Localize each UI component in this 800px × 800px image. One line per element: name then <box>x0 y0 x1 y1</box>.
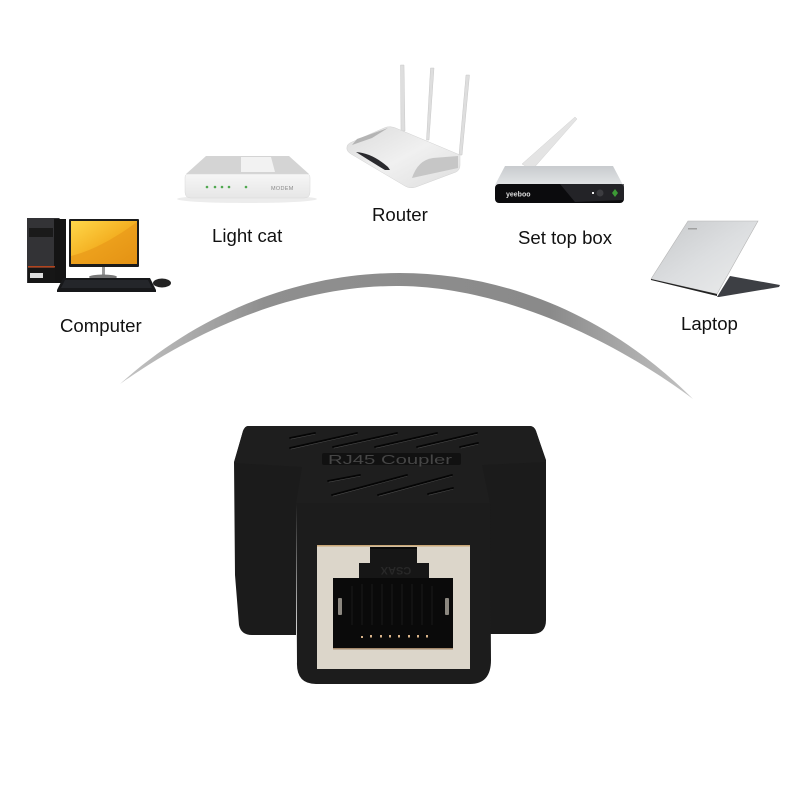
jack tab text: CSAX <box>380 564 411 576</box>
coupler rear body <box>234 426 546 635</box>
coupler vent slots <box>290 433 478 495</box>
modem shadow <box>177 195 317 203</box>
device: router <box>347 65 470 188</box>
computer mouse <box>153 278 171 288</box>
RJ45 coupler <box>234 426 546 684</box>
laptop logo <box>688 228 697 230</box>
label: Light cat: Light cat <box>212 225 283 246</box>
computer monitor <box>69 219 139 280</box>
router upper shading <box>352 128 388 145</box>
coupler label plate <box>322 453 461 465</box>
set top box top <box>495 166 623 185</box>
modem LEDs <box>206 186 247 188</box>
router body <box>347 127 460 188</box>
jack side clips <box>338 598 449 615</box>
jack contact pins <box>361 635 428 638</box>
coupler top face <box>234 426 546 503</box>
jack opening <box>333 547 453 648</box>
set top box brand: yeeboo <box>506 192 531 198</box>
router dark vent <box>356 152 390 170</box>
coupler vent highlights <box>291 434 478 496</box>
device: set top box <box>495 117 624 203</box>
label: Set top box: Set top box <box>518 227 613 248</box>
label: Router: Router <box>372 204 428 225</box>
computer tower <box>27 218 66 283</box>
coupler front body <box>296 503 491 684</box>
jack latch tab <box>359 549 429 578</box>
router side grille <box>412 156 458 178</box>
label: Computer: Computer <box>60 315 142 336</box>
device: laptop <box>651 221 780 297</box>
router antennas <box>400 65 470 155</box>
metal jack shield <box>317 545 470 669</box>
jack lower lip <box>333 648 453 650</box>
arc connecting devices <box>120 273 693 399</box>
modem top <box>186 156 309 174</box>
laptop lid <box>651 221 758 294</box>
set top box front <box>495 184 624 203</box>
set top box buttons <box>592 189 618 197</box>
laptop keyboard base <box>717 276 780 297</box>
computer keyboard <box>57 278 156 292</box>
coupler label text: RJ45 Coupler <box>328 452 453 467</box>
set top box antenna <box>522 117 577 170</box>
jack contact ridges <box>352 584 432 625</box>
device: computer <box>27 218 171 292</box>
modem front <box>185 174 310 198</box>
label: Laptop: Laptop <box>681 313 738 334</box>
modem brand text: MODEM <box>271 186 294 192</box>
device: light cat modem <box>177 156 317 203</box>
